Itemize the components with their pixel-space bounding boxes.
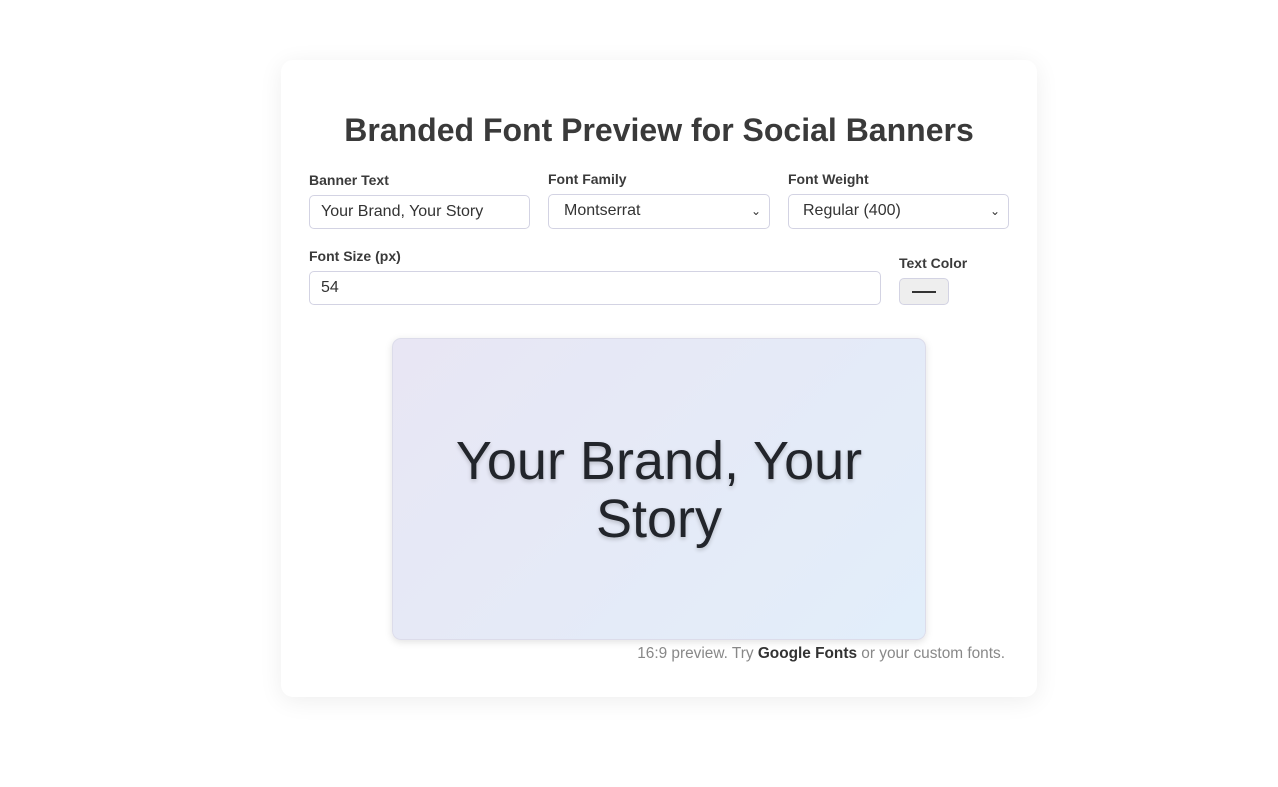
banner preview — [392, 338, 926, 640]
preview text: Story — [596, 489, 722, 549]
select: font weight: Regular (400) — [803, 202, 901, 219]
select: font weight — [788, 194, 1009, 229]
preview text: Your Brand, Your — [456, 431, 862, 491]
input: font size — [309, 271, 881, 305]
label: font family: Font Family — [548, 171, 627, 187]
input: font size: 54 — [321, 279, 339, 296]
select: font weight: ⌄ — [990, 204, 1000, 218]
label: text color: Text Color — [899, 255, 967, 271]
select: font family: Montserrat — [564, 202, 640, 219]
title: Branded Font Preview for Social Banners — [344, 112, 974, 148]
label: banner text: Banner Text — [309, 172, 389, 188]
caption: 16:9 preview. Try Google Fonts or your custom fonts. — [637, 645, 1005, 662]
label: font weight: Font Weight — [788, 171, 869, 187]
card panel — [281, 60, 1037, 697]
select: font family: ⌄ — [751, 204, 761, 218]
input: banner text — [309, 195, 530, 229]
select: font family — [548, 194, 770, 229]
label: font size: Font Size (px) — [309, 248, 401, 264]
input: banner text: Your Brand, Your Story — [321, 203, 483, 220]
preview text — [456, 431, 862, 552]
color swatch — [899, 278, 949, 305]
